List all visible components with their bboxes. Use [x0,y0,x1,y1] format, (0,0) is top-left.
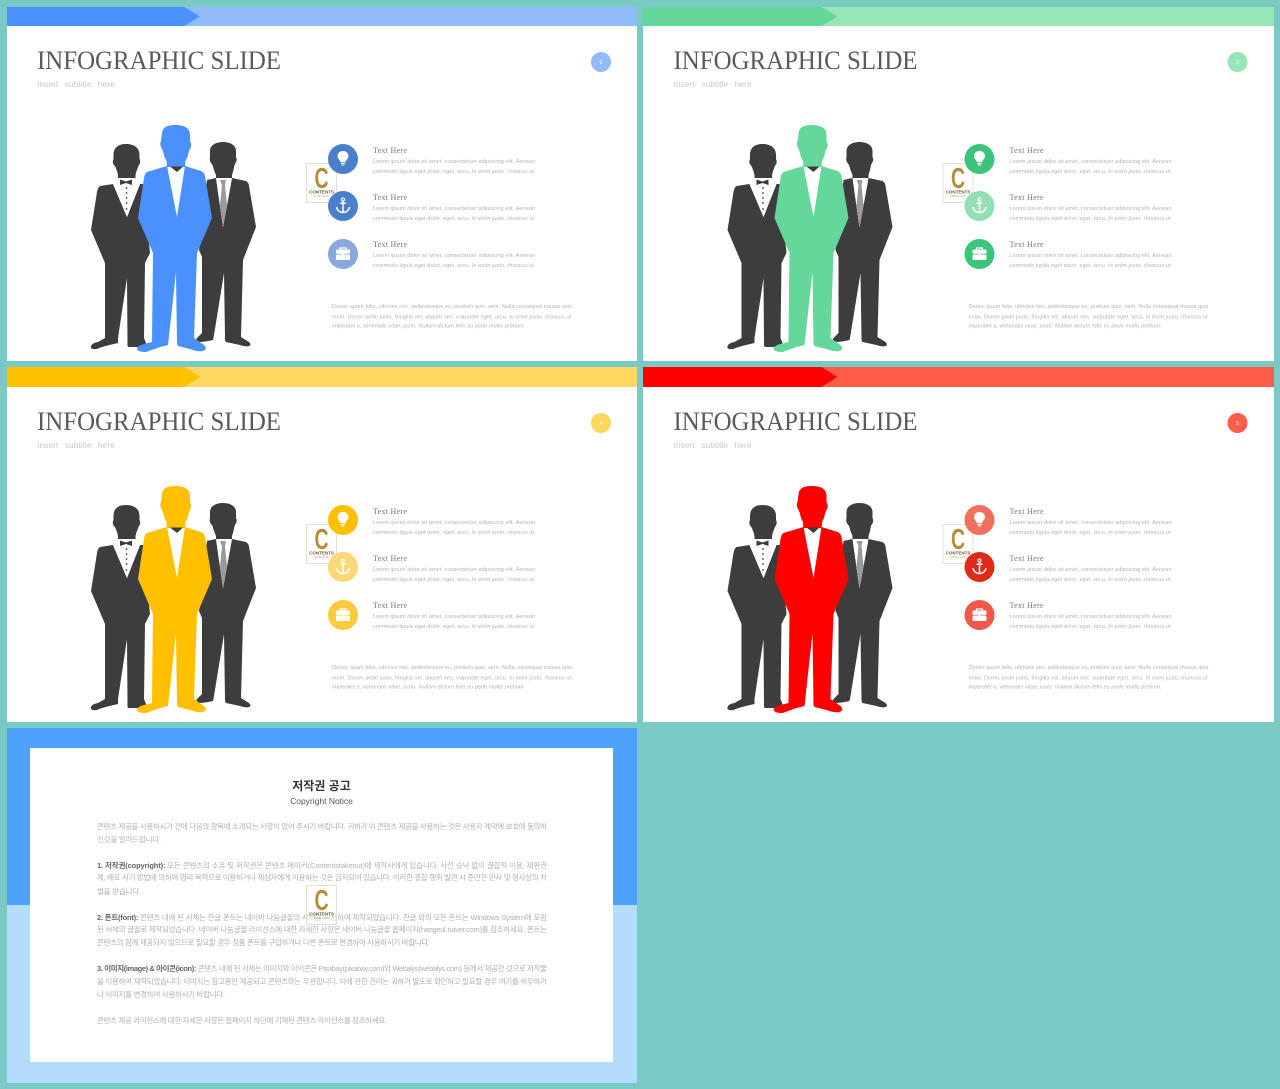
subtitle: Insert subtitle here [37,440,115,450]
intro text: 콘텐츠 제공을 사용하시기 전에 다음의 항목에 소개되는 사항이 있어 주시기 바랍니다. 귀하가 이 콘텐츠 제공을 사용하는 것은 사용자 계약에 보호에 동의하 [97,821,547,831]
page number badge: 2 [600,60,603,66]
page number badge [1228,52,1248,72]
watermark [306,164,336,202]
item 3: Text Here [1010,240,1044,249]
intro text: 신것을 알려드립니다. [97,834,161,844]
section 3 image and icon: 을 이용하여 제작되었습니다. 이미지는 참고용만 제공되고 콘텐츠와는 무관합니다. 이에 관한 권리는 귀하가 별도로 확인하고 필요할 경우 여기를 쉬우하거 [97,976,547,986]
item 1: Text Here [373,146,407,155]
item 3: Lorem ipsum dolor sit amet, consectetuer adipiscing elit. Aenean [373,614,535,620]
bottom paragraph: enim. Donec pede justo, fringilla vel, aliquet nec, vulputate eget, arcu. In enim justo, rhoncus ut [332,676,571,682]
item 3: Text Here [373,240,407,249]
section 3 image and icon [97,963,547,999]
bottom paragraph [968,304,1209,330]
item 1: Text Here [1010,146,1044,155]
figures: three businessmen, red centre [727,486,892,713]
page number badge [591,413,611,433]
item 2 [964,191,1172,222]
bottom paragraph: Donec quam felis, ultricies nec, pellentesque eu, pretium quis, sem. Nulla consequat massa quis [968,665,1209,671]
item 2: Lorem ipsum dolor sit amet, consectetuer adipiscing elit. Aenean [373,567,535,573]
watermark [943,524,973,564]
section 1 copyright: 제, 배포 사기 방법에 의하여 영리 목적으로 이용하거나 제삼자에게 이용하는 것은 금지되어 있습니다. 이러한 결합 행위 발견 시 준민한 민사 및 형사상의 처 [97,872,547,882]
item 2: commodo ligula eget dolor, eget, arcu. In enim justo, rhoncus ut [1010,577,1171,583]
item 2 [328,191,535,222]
page number badge: 4 [600,421,603,427]
item 1 [328,144,535,175]
panel: yellow slide [7,367,637,722]
bottom paragraph: Donec quam felis, ultricies nec, pellentesque eu, pretium quis, sem. Nulla consequat massa quis [968,304,1209,310]
figures: three businessmen, yellow centre [91,486,256,713]
item 2: Lorem ipsum dolor sit amet, consectetuer adipiscing elit. Aenean [373,206,535,212]
item 3: Lorem ipsum dolor sit amet, consectetuer adipiscing elit. Aenean [1010,614,1172,620]
subtitle: Insert subtitle here [674,79,752,89]
item 2: commodo ligula eget dolor, eget, arcu. In enim justo, rhoncus ut [1010,216,1171,222]
item 2: Text Here [373,554,407,563]
section 1 copyright [97,860,547,896]
header bar: blue [7,7,637,26]
section 1 copyright: 1. 저작권(copyright): 모든 콘텐츠의 소유 및 저작권은 콘텐츠 메이커(Contentstakeout)에 제작사에게 있습니다. 사전 승낙 없이 결합적 이용, 재판권 [97,860,547,870]
panel: blue slide [7,7,637,361]
item 2: Text Here [373,193,407,202]
item 3: Text Here [1010,601,1044,610]
item 3 [964,239,1172,269]
title: INFOGRAPHIC SLIDE [674,46,918,75]
bottom paragraph [332,304,572,330]
section 2 font: 콘텐츠의 함께 제공되지 않으므로 필요할 경우 정품 폰트를 구입하거나 다른 폰트로 변경하여 사용하시기 바랍니다. [97,937,430,947]
item 1 [328,505,535,536]
item 3 [328,239,535,269]
item 3: commodo ligula eget dolor, eget, arcu. In enim justo, rhoncus ut [373,263,534,269]
section 3 image and icon: 나 이미지를 변경하여 사용하시기 바랍니다. [97,989,225,999]
item 3: Lorem ipsum dolor sit amet, consectetuer adipiscing elit. Aenean [373,253,535,259]
item 1: Lorem ipsum dolor sit amet, consectetuer adipiscing elit. Aenean [1010,520,1172,526]
page number badge: 3 [1236,60,1239,66]
item 1: Lorem ipsum dolor sit amet, consectetuer adipiscing elit. Aenean [1010,159,1172,165]
watermark [306,524,336,564]
section 2 font: 2. 폰트(font): 콘텐츠 내에 된 서체는 한글 폰트는 네이버 나눔글꼴의 서체를 사용하여 제작되었습니다. 한글 외의 모든 폰트는 Windows System에 포함 [97,912,547,922]
subtitle: Insert subtitle here [37,79,115,89]
figures: three businessmen, green centre [727,125,892,352]
header bar: red [643,367,1274,387]
item 2: Text Here [1010,554,1044,563]
item 2: Lorem ipsum dolor sit amet, consectetuer adipiscing elit. Aenean [1010,206,1172,212]
closing line: 콘텐츠 제공 라이선스에 대한 자세한 사항은 홈페이지 하단에 기재된 콘텐츠 라이선스를 참조하세요. [97,1015,387,1025]
panel: green slide [643,7,1274,361]
item 1 [964,505,1172,536]
item 1: Text Here [1010,507,1044,516]
item 1: Lorem ipsum dolor sit amet, consectetuer adipiscing elit. Aenean [373,159,535,165]
item 3 [964,600,1172,630]
page number badge: 5 [1236,421,1239,427]
bottom paragraph [968,665,1209,690]
title: INFOGRAPHIC SLIDE [37,407,281,436]
section 2 font [97,912,547,947]
item 1: Text Here [373,507,407,516]
bottom paragraph: Donec quam felis, ultricies nec, pellentesque eu, pretium quis, sem. Nulla consequat massa quis [332,665,572,671]
item 3: Text Here [373,601,407,610]
item 1: commodo ligula eget dolor, eget, arcu. In enim justo, rhoncus ut [373,530,534,536]
title: INFOGRAPHIC SLIDE [674,407,918,436]
header bar: yellow [7,367,637,387]
watermark [306,886,336,924]
item 2: Text Here [1010,193,1044,202]
bottom paragraph: imperdiet a, venenatis vitae, justo. Nullam dictum felis eu pede mollis pretium. [968,324,1162,330]
watermark [943,164,973,202]
bottom paragraph: imperdiet a, venenatis vitae, justo. Nullam dictum felis eu pede mollis pretium. [968,684,1162,690]
section 3 image and icon: 3. 이미지(image) & 아이콘(icon): 콘텐츠 내에 된 서체는 이미지와 아이콘은 Pixabay(pixabay.com)와 Webalys(webalys.com) 등에서 제공한 것으로 저작물 [97,963,547,973]
section 2 font: 된 서체의 글꼴로 제작되었습니다. 네이버 나눔글꼴 라이선스에 대한 자세한 사항은 네이버 나눔글꼴 홈페이지(hangeul.naver.com)를 참조하세요. 폰트는 [97,924,547,934]
subtitle: Insert subtitle here [674,440,752,450]
section 1 copyright: 벌을 받습니다. [97,886,141,896]
item 1: Lorem ipsum dolor sit amet, consectetuer adipiscing elit. Aenean [373,520,535,526]
bottom paragraph [332,665,572,690]
item 2 [328,552,535,583]
intro text [97,821,547,844]
page number badge [1228,413,1248,433]
bottom paragraph: enim. Donec pede justo, fringilla vel, aliquet nec, vulputate eget, arcu. In enim justo, rhoncus ut [332,314,571,320]
item 2: commodo ligula eget dolor, eget, arcu. In enim justo, rhoncus ut [373,577,534,583]
bottom paragraph: Donec quam felis, ultricies nec, pellentesque eu, pretium quis, sem. Nulla consequat massa quis [332,304,572,310]
bottom paragraph: imperdiet a, venenatis vitae, justo. Nullam dictum felis eu pede mollis pretium. [332,324,525,330]
item 3: commodo ligula eget dolor, eget, arcu. In enim justo, rhoncus ut [1010,624,1171,630]
copyright heading: 저작권 공고 [292,778,351,793]
header bar: green [643,7,1274,26]
title: INFOGRAPHIC SLIDE [37,46,281,75]
item 3: Lorem ipsum dolor sit amet, consectetuer adipiscing elit. Aenean [1010,253,1172,259]
copyright subheading: Copyright Notice [290,796,353,806]
item 3: commodo ligula eget dolor, eget, arcu. In enim justo, rhoncus ut [373,624,534,630]
item 1: commodo ligula eget dolor, eget, arcu. In enim justo, rhoncus ut [1010,169,1171,175]
panel: red slide [643,367,1274,722]
item 2: Lorem ipsum dolor sit amet, consectetuer adipiscing elit. Aenean [1010,567,1172,573]
item 3: commodo ligula eget dolor, eget, arcu. In enim justo, rhoncus ut [1010,263,1171,269]
page number badge [591,52,611,72]
bottom paragraph: enim. Donec pede justo, fringilla vel, aliquet nec, vulputate eget, arcu. In enim justo, rhoncus ut [968,676,1208,682]
item 1: commodo ligula eget dolor, eget, arcu. In enim justo, rhoncus ut [373,169,534,175]
panel: copyright notice [7,728,637,1083]
item 3 [328,600,535,630]
bottom paragraph: enim. Donec pede justo, fringilla vel, aliquet nec, vulputate eget, arcu. In enim justo, rhoncus ut [968,314,1208,320]
bottom paragraph: imperdiet a, venenatis vitae, justo. Nullam dictum felis eu pede mollis pretium. [332,684,525,690]
figures: three businessmen, blue centre [91,125,256,352]
item 2 [964,552,1172,583]
item 2: commodo ligula eget dolor, eget, arcu. In enim justo, rhoncus ut [373,216,534,222]
item 1 [964,144,1172,175]
item 1: commodo ligula eget dolor, eget, arcu. In enim justo, rhoncus ut [1010,530,1171,536]
